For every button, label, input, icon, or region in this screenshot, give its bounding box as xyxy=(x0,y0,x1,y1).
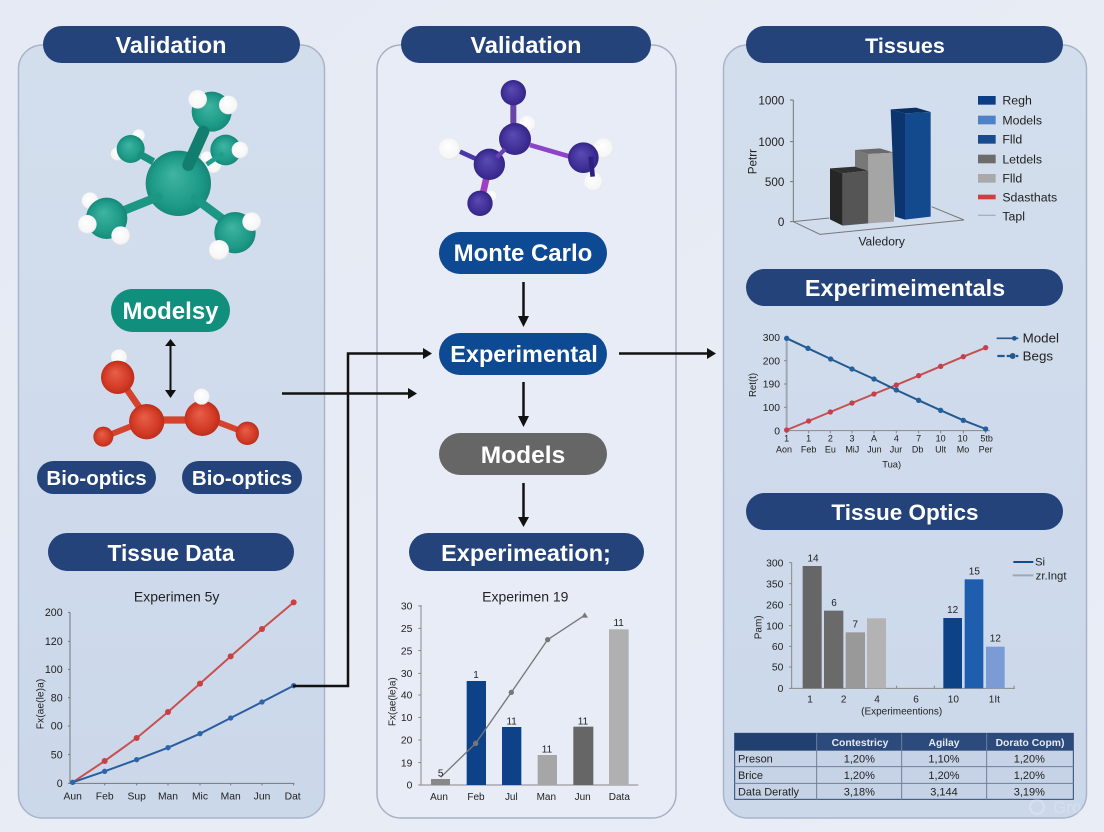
chart title: Experimen 5y xyxy=(134,588,219,604)
heading: Tissues xyxy=(746,26,1063,63)
heading: Experimeation: Experimeation; xyxy=(441,540,611,566)
data table: 3,18% xyxy=(844,787,875,799)
3D bar chart: Models xyxy=(1002,114,1042,128)
grouped bar chart: 1 xyxy=(807,694,813,705)
data table: 1,20% xyxy=(844,753,875,765)
combo chart: Experimen 19: 30 xyxy=(401,669,413,680)
arrow: Experimental to Models xyxy=(518,382,529,427)
combo chart: Experimen 19: 11 xyxy=(613,618,624,629)
combo chart: Experimen 19: 0 xyxy=(407,781,413,792)
data table: Data Deratly xyxy=(738,787,800,799)
line chart: Experimen 5y: 100 xyxy=(45,664,63,676)
combo chart: Experimen 19: Jul xyxy=(505,792,518,803)
data table: Preson xyxy=(738,753,773,765)
data table: Agilay xyxy=(928,738,960,749)
line chart: Experimen 5y: 50 xyxy=(51,749,63,761)
line chart: Experimen 5y: Man xyxy=(158,792,178,803)
grouped bar chart: 4 xyxy=(874,694,880,705)
combo chart: Experimen 19: 11 xyxy=(542,744,553,755)
line chart: crossing series: Jur xyxy=(890,445,902,455)
combo chart: Experimen 19: 30 xyxy=(401,602,413,613)
3D bar chart: 0 xyxy=(778,216,785,229)
line chart: crossing series: 1 xyxy=(806,434,811,444)
3D bar chart: Tapl xyxy=(1002,209,1025,223)
line chart: Experimen 5y: Jun xyxy=(254,792,271,803)
combo chart: Experimen 19: 25 xyxy=(401,646,413,657)
line chart: crossing series: Feb xyxy=(801,445,816,455)
data table: Dorato Copm) xyxy=(996,738,1064,749)
label: Bio-optics right xyxy=(182,461,302,494)
combo chart: Experimen 19 xyxy=(387,588,638,803)
arrow: Experimental to right panel xyxy=(619,348,716,359)
panel: left column xyxy=(18,26,324,818)
combo chart: Experimen 19: 25 xyxy=(401,624,413,635)
line chart: crossing series: 1 xyxy=(784,434,789,444)
line chart: crossing series xyxy=(748,331,1059,469)
label: Modelsy xyxy=(111,289,230,332)
line chart: crossing series: 300 xyxy=(763,333,780,344)
line chart: Experimen 5y: 00 xyxy=(51,721,63,733)
watermark: Gro xyxy=(1053,798,1081,817)
data table: 3,144 xyxy=(930,787,958,799)
icon: red molecule xyxy=(93,349,259,447)
label: Models xyxy=(439,433,607,475)
3D bar chart: Petrr xyxy=(746,149,759,174)
grouped bar chart xyxy=(754,553,1067,718)
combo chart: Experimen 19: 10 xyxy=(401,713,413,724)
line chart: crossing series: 100 xyxy=(763,403,780,414)
3D bar chart: 1000 xyxy=(758,136,785,149)
grouped bar chart: 60 xyxy=(772,642,784,653)
chart title: Experimen 19 xyxy=(482,588,569,604)
line chart: crossing series: A xyxy=(871,434,877,444)
heading: Validation: Validation xyxy=(470,32,582,58)
grouped bar chart: 50 xyxy=(772,663,784,674)
combo chart: Experimen 19: Jun xyxy=(575,792,591,803)
3D bar chart xyxy=(746,94,1057,249)
line chart: crossing series: Eu xyxy=(825,445,836,455)
panel: right column xyxy=(724,26,1086,818)
line chart: crossing series: Model xyxy=(1023,331,1059,346)
grouped bar chart: 6 xyxy=(831,598,837,609)
3D bar chart: Regh xyxy=(1002,94,1032,108)
icon: purple molecule xyxy=(439,80,613,216)
line chart: Experimen 5y: Fx(ae(le)a) xyxy=(35,679,46,729)
line chart: crossing series: 10 xyxy=(936,434,946,444)
label: Monte Carlo: Monte Carlo xyxy=(454,240,592,267)
heading: Experimeation xyxy=(409,533,644,571)
3D bar chart: Sdasthats xyxy=(1002,191,1057,205)
combo chart: Experimen 19: 5 xyxy=(438,769,444,780)
watermark xyxy=(1030,798,1081,817)
heading: Tissue Data xyxy=(48,533,294,571)
line chart: Experimen 5y: Aun xyxy=(63,792,82,803)
heading: Validation xyxy=(43,26,300,63)
grouped bar chart: 12 xyxy=(990,634,1001,645)
label: Experimental: Experimental xyxy=(450,341,598,367)
line chart: crossing series: 0 xyxy=(774,426,780,437)
line chart: Experimen 5y: Man xyxy=(221,792,241,803)
3D bar chart: 500 xyxy=(765,176,785,189)
grouped bar chart: 7 xyxy=(853,620,859,631)
data table: 1,10% xyxy=(928,753,960,765)
line chart: crossing series: 7 xyxy=(916,434,921,444)
line chart: crossing series: 4 xyxy=(894,434,899,444)
3D bar chart: Flld xyxy=(1002,171,1022,185)
line chart: Experimen 5y xyxy=(35,588,301,803)
line chart: Experimen 5y: Dat xyxy=(285,792,301,803)
grouped bar chart: 350 xyxy=(766,579,784,590)
line chart: crossing series: 200 xyxy=(763,356,780,367)
heading: Experimeimentals xyxy=(746,269,1063,306)
line chart: crossing series: Begs xyxy=(1023,349,1053,364)
grouped bar chart: 260 xyxy=(766,600,784,611)
line chart: Experimen 5y: 80 xyxy=(51,692,63,704)
label: Monte Carlo xyxy=(439,232,607,274)
grouped bar chart: 100 xyxy=(766,621,784,632)
label: Bio-optics left xyxy=(37,461,156,494)
line chart: crossing series: 190 xyxy=(763,380,780,391)
data table: Contestricy xyxy=(832,738,889,749)
grouped bar chart: Pam) xyxy=(754,615,765,639)
combo chart: Experimen 19: Data xyxy=(609,792,630,803)
combo chart: Experimen 19: 11 xyxy=(578,716,589,727)
arrow: left panel to centre xyxy=(282,388,417,399)
line chart: crossing series: 3 xyxy=(849,434,854,444)
combo chart: Experimen 19: 40 xyxy=(401,691,413,702)
grouped bar chart: zr.Ingt xyxy=(1036,571,1067,583)
line chart: Experimen 5y: Feb xyxy=(96,792,114,803)
icon: teal molecule xyxy=(78,90,261,260)
combo chart: Experimen 19: Man xyxy=(537,792,556,803)
heading: Experimeimentals: Experimeimentals xyxy=(805,275,1005,301)
label: Experimental xyxy=(439,333,607,375)
line chart: crossing series: MiJ xyxy=(845,445,859,455)
arrow: double-headed xyxy=(165,339,176,398)
heading: Tissue Optics xyxy=(746,493,1063,530)
line chart: Experimen 5y: 0 xyxy=(57,778,63,790)
arrow: Models to Experimeation xyxy=(518,483,529,527)
line chart: crossing series: Jun xyxy=(867,445,882,455)
label: Bio-optics right: Bio-optics xyxy=(192,467,292,490)
arrow: Monte Carlo to Experimental xyxy=(518,282,529,327)
3D bar chart: 1000 xyxy=(758,94,785,107)
line chart: Experimen 5y: 200 xyxy=(45,607,63,619)
grouped bar chart: 10 xyxy=(948,694,959,705)
heading: Validation xyxy=(401,26,651,63)
line chart: crossing series: Db xyxy=(912,445,923,455)
line chart: crossing series: 5tb xyxy=(980,434,993,444)
panel: centre column xyxy=(377,26,676,818)
line chart: crossing series: Mo xyxy=(957,445,969,455)
arrow: left chart to Experimental xyxy=(293,348,432,686)
line chart: Experimen 5y: 120 xyxy=(45,636,63,648)
line chart: crossing series: Per xyxy=(979,445,993,455)
heading: Validation: Validation xyxy=(116,32,226,58)
3D bar chart: Flld xyxy=(1002,133,1022,147)
heading: Tissues: Tissues xyxy=(865,34,945,58)
combo chart: Experimen 19: 1 xyxy=(473,670,479,681)
grouped bar chart: 300 xyxy=(766,558,784,569)
data table: 1,20% xyxy=(1014,770,1045,782)
line chart: crossing series: Aon xyxy=(776,445,792,455)
line chart: crossing series: Ult xyxy=(935,445,947,455)
combo chart: Experimen 19: 11 xyxy=(506,716,517,727)
label: Modelsy: Modelsy xyxy=(122,298,219,325)
combo chart: Experimen 19: 20 xyxy=(401,736,413,747)
data table: 1,20% xyxy=(1014,753,1045,765)
line chart: Experimen 5y: Sup xyxy=(127,792,146,803)
3D bar chart: Letdels xyxy=(1002,152,1042,166)
line chart: crossing series: 2 xyxy=(828,434,833,444)
grouped bar chart: 2 xyxy=(841,694,847,705)
line chart: crossing series: 10 xyxy=(958,434,968,444)
line chart: crossing series: Tua) xyxy=(882,459,901,469)
label: Bio-optics left: Bio-optics xyxy=(46,467,147,490)
data table: 3,19% xyxy=(1014,787,1045,799)
data table: 1,20% xyxy=(928,770,960,782)
grouped bar chart: (Experimeentions) xyxy=(861,707,942,718)
combo chart: Experimen 19: Fx(ae(le)a) xyxy=(387,677,398,726)
heading: Tissue Data: Tissue Data xyxy=(108,540,235,566)
grouped bar chart: Si xyxy=(1035,556,1045,568)
heading: Tissue Optics: Tissue Optics xyxy=(831,500,979,525)
grouped bar chart: 15 xyxy=(969,567,980,578)
combo chart: Experimen 19: Feb xyxy=(467,792,485,803)
combo chart: Experimen 19: 19 xyxy=(401,758,413,769)
line chart: Experimen 5y: Mic xyxy=(192,792,208,803)
label: Models: Models xyxy=(481,442,565,469)
data table xyxy=(735,733,1073,799)
line chart: crossing series: Ret(t) xyxy=(748,373,759,397)
3D bar chart: Valedory xyxy=(858,235,905,249)
grouped bar chart: 1It xyxy=(989,694,1000,705)
grouped bar chart: 14 xyxy=(807,553,819,564)
grouped bar chart: 6 xyxy=(913,694,919,705)
data table: Brice xyxy=(738,770,763,782)
combo chart: Experimen 19: Aun xyxy=(430,792,448,803)
grouped bar chart: 0 xyxy=(778,684,784,695)
data table: 1,20% xyxy=(844,770,875,782)
grouped bar chart: 12 xyxy=(947,605,959,616)
